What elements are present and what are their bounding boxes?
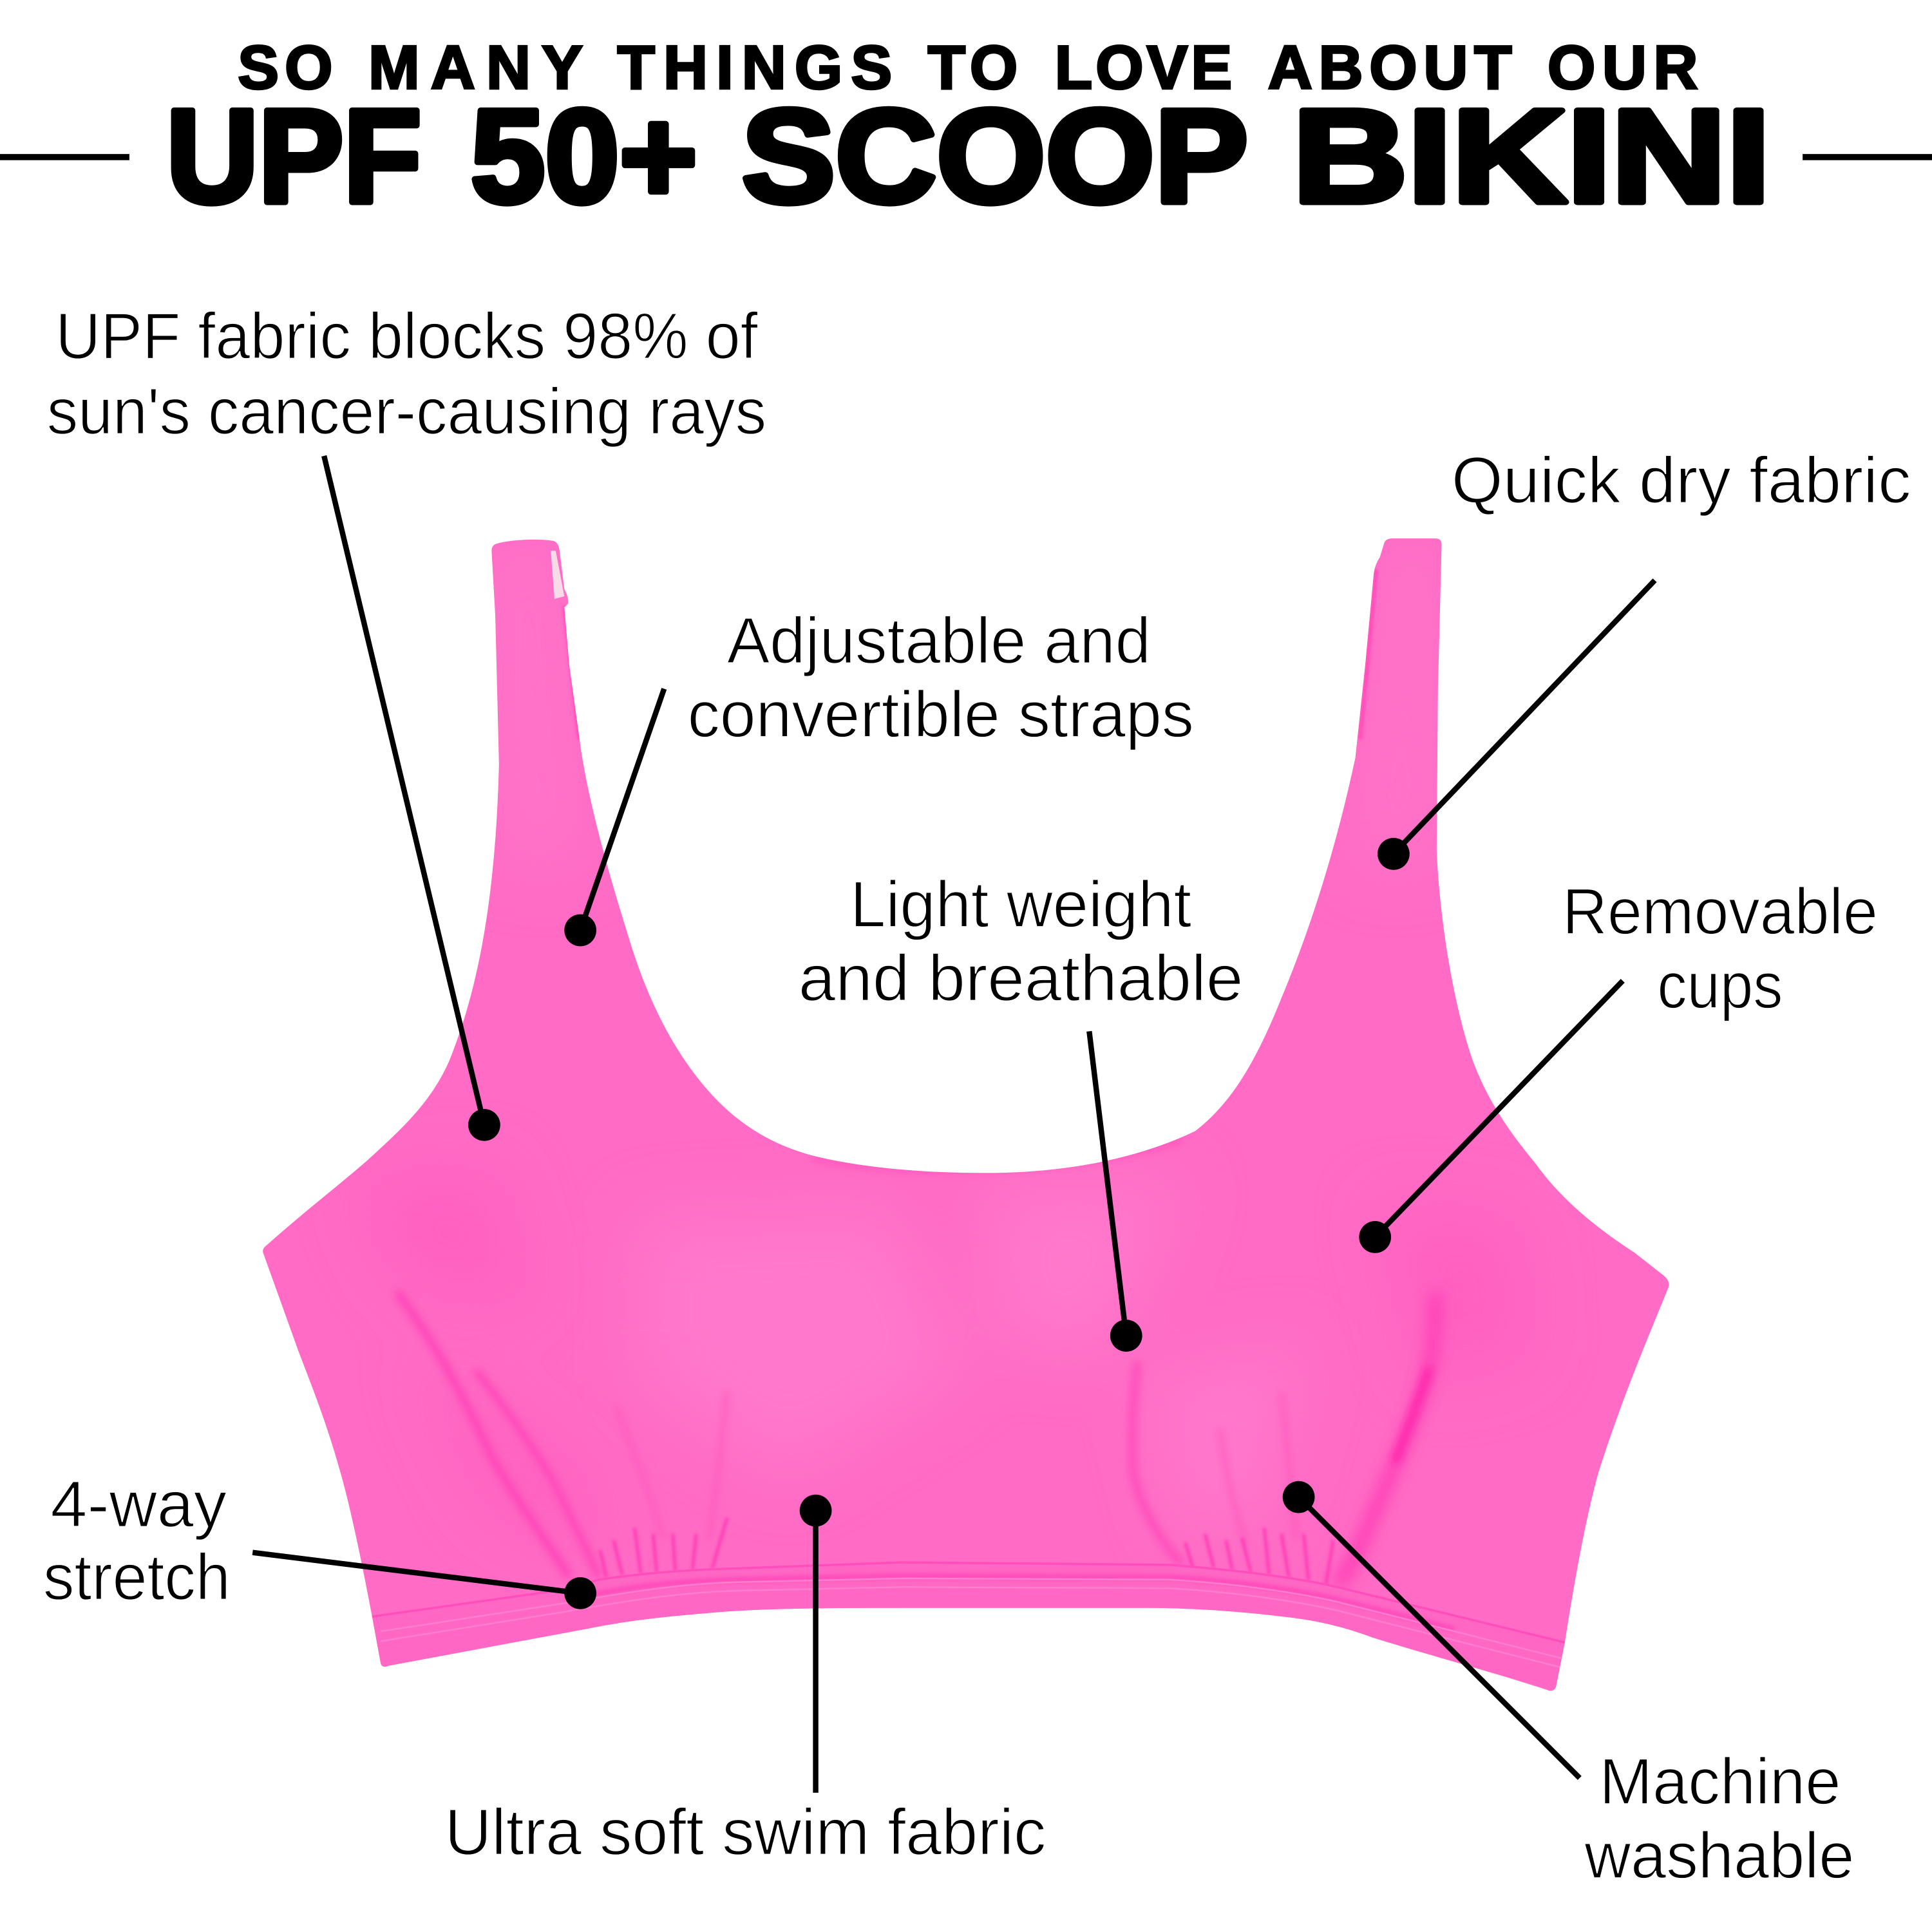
title: main heading: UPF [166,82,421,231]
callout: machine washable: washable [1584,1819,1854,1892]
neckline soft shadow [813,1140,1183,1170]
callout: ultra soft [445,1495,1046,1868]
garment base shape [263,538,1669,1690]
strap inner shade [564,569,1376,739]
callout: quick dry: Quick dry fabric [1452,444,1911,517]
title: subheading [238,33,1698,102]
callout: removable cups: cups [1657,949,1783,1022]
callout: adjustable straps: convertible straps [688,678,1194,751]
callout: 4-way stretch: stretch [43,1540,231,1613]
callout: removable cups: Removable [1562,875,1878,948]
large folds [397,1291,569,1577]
title: subheading: SO [238,33,333,102]
callout: quick dry [1378,444,1911,870]
heading rule right [1803,154,1932,160]
fabric shading and folds [357,530,1565,1690]
hem center tone [579,1576,1454,1629]
title: subheading: OUR [1548,33,1698,102]
callout: UPF sun protection: UPF fabric blocks 98% of [55,300,758,373]
title: subheading: THINGS [618,33,892,102]
title: main heading: SCOOP [742,82,1248,231]
hem stitching [381,1578,1562,1658]
callout: ultra soft: Ultra soft swim fabric [445,1795,1046,1868]
bikini top illustration [263,530,1669,1690]
soft light and dark patches [493,530,1435,862]
callout: light weight: and breathable [799,942,1243,1015]
callout: adjustable straps: Adjustable and [727,604,1151,677]
title: subheading: LOVE [1055,33,1232,102]
hem top seam [372,1562,1565,1642]
hem band [372,1562,1565,1690]
title: subheading: MANY [368,33,583,102]
title: main heading: 50+ [471,82,697,231]
title: subheading: ABOUT [1268,33,1512,102]
callout: UPF sun protection [47,300,766,1141]
callout: machine washable [1283,1481,1854,1892]
callout: light weight [799,868,1243,1352]
callout: removable cups [1359,875,1878,1253]
title: subheading: TO [928,33,1018,102]
callout: machine washable: Machine [1599,1745,1841,1818]
gathered pleats [600,1518,1333,1584]
callout: 4-way stretch: 4-way [50,1468,227,1541]
callout: 4-way stretch [43,1468,596,1613]
heading rule left [0,154,129,160]
callout: light weight: Light weight [850,868,1191,941]
callout: adjustable straps [564,604,1194,946]
title: main heading: BIKINI [1293,82,1770,231]
title: main heading [166,82,1770,231]
callout: UPF sun protection: sun's cancer-causing rays [47,375,766,448]
strap inner tab [551,551,564,599]
